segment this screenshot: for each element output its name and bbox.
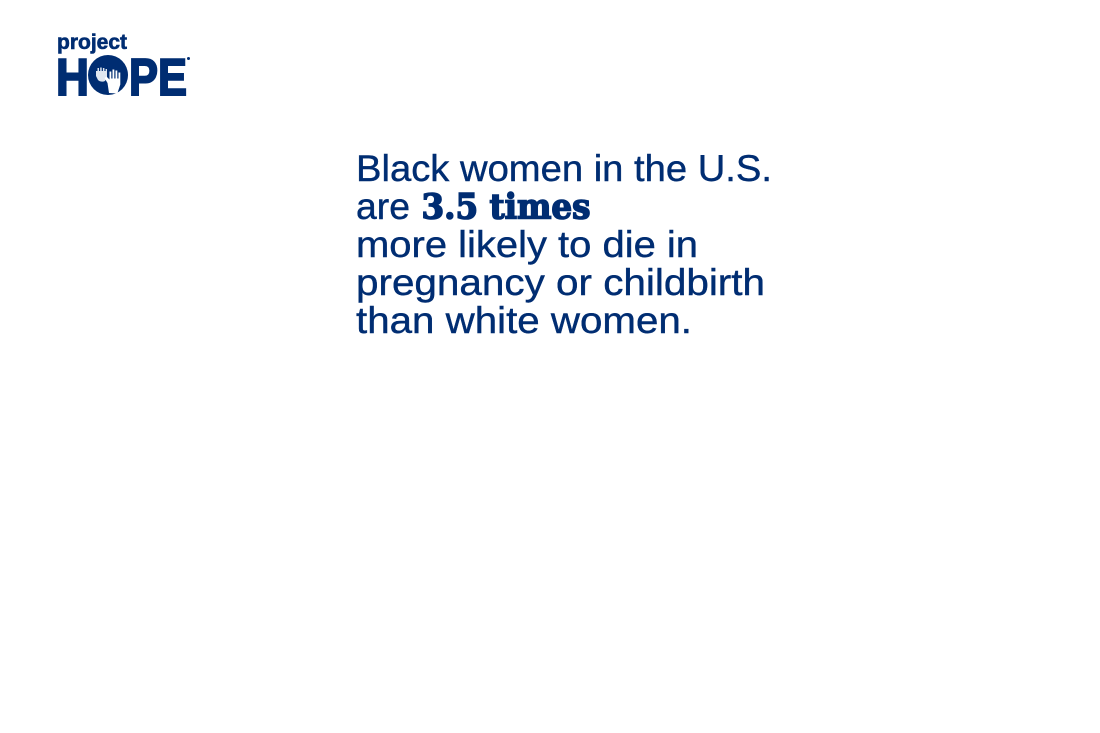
line 5: than white women. xyxy=(356,300,692,341)
logo word: project: project xyxy=(57,31,127,54)
logo icon: O with hands xyxy=(88,55,128,95)
logo: project HOPE xyxy=(56,31,190,107)
logo letter: H: H xyxy=(56,49,89,107)
line 4: pregnancy or childbirth xyxy=(356,262,765,303)
logo registered mark xyxy=(187,57,190,60)
line 2: emphasis 3.5 times: 3.5 times xyxy=(422,186,590,228)
line 1: Black women in the U.S. xyxy=(356,148,772,189)
logo letters: PE: PE xyxy=(129,49,187,107)
line 3: more likely to die in xyxy=(356,224,698,265)
line 2: are: are xyxy=(356,186,410,227)
main statement text xyxy=(356,148,772,341)
